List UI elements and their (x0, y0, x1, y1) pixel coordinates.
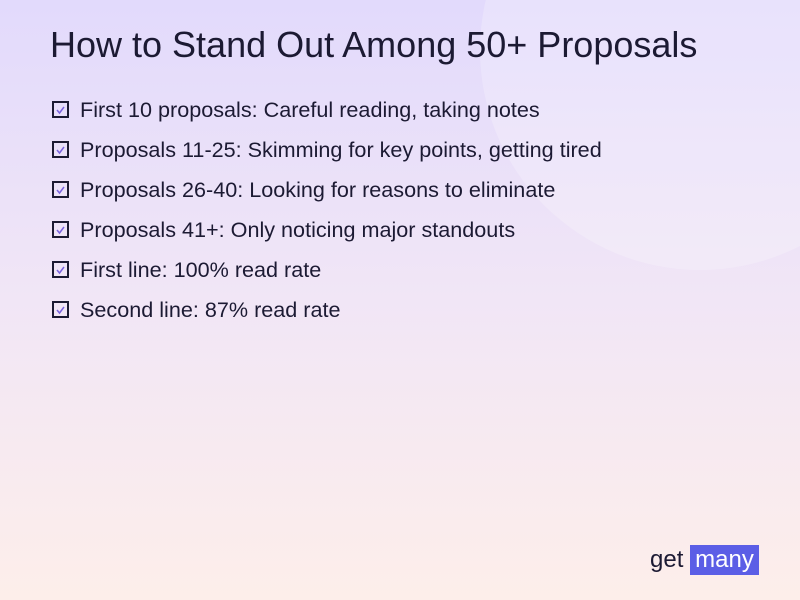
item 4: Proposals 41+: Only noticing major standouts (80, 217, 515, 242)
logo (650, 545, 759, 575)
logo: get (650, 546, 683, 573)
title: How to Stand Out Among 50+ Proposals (50, 24, 697, 65)
item 1: First 10 proposals: Careful reading, taking notes (80, 97, 540, 122)
logo: many (695, 546, 754, 573)
item 3: Proposals 26-40: Looking for reasons to eliminate (80, 177, 555, 202)
item 2: Proposals 11-25: Skimming for key points, getting tired (80, 137, 602, 162)
item 5: First line: 100% read rate (80, 257, 321, 282)
item 6: Second line: 87% read rate (80, 297, 340, 322)
